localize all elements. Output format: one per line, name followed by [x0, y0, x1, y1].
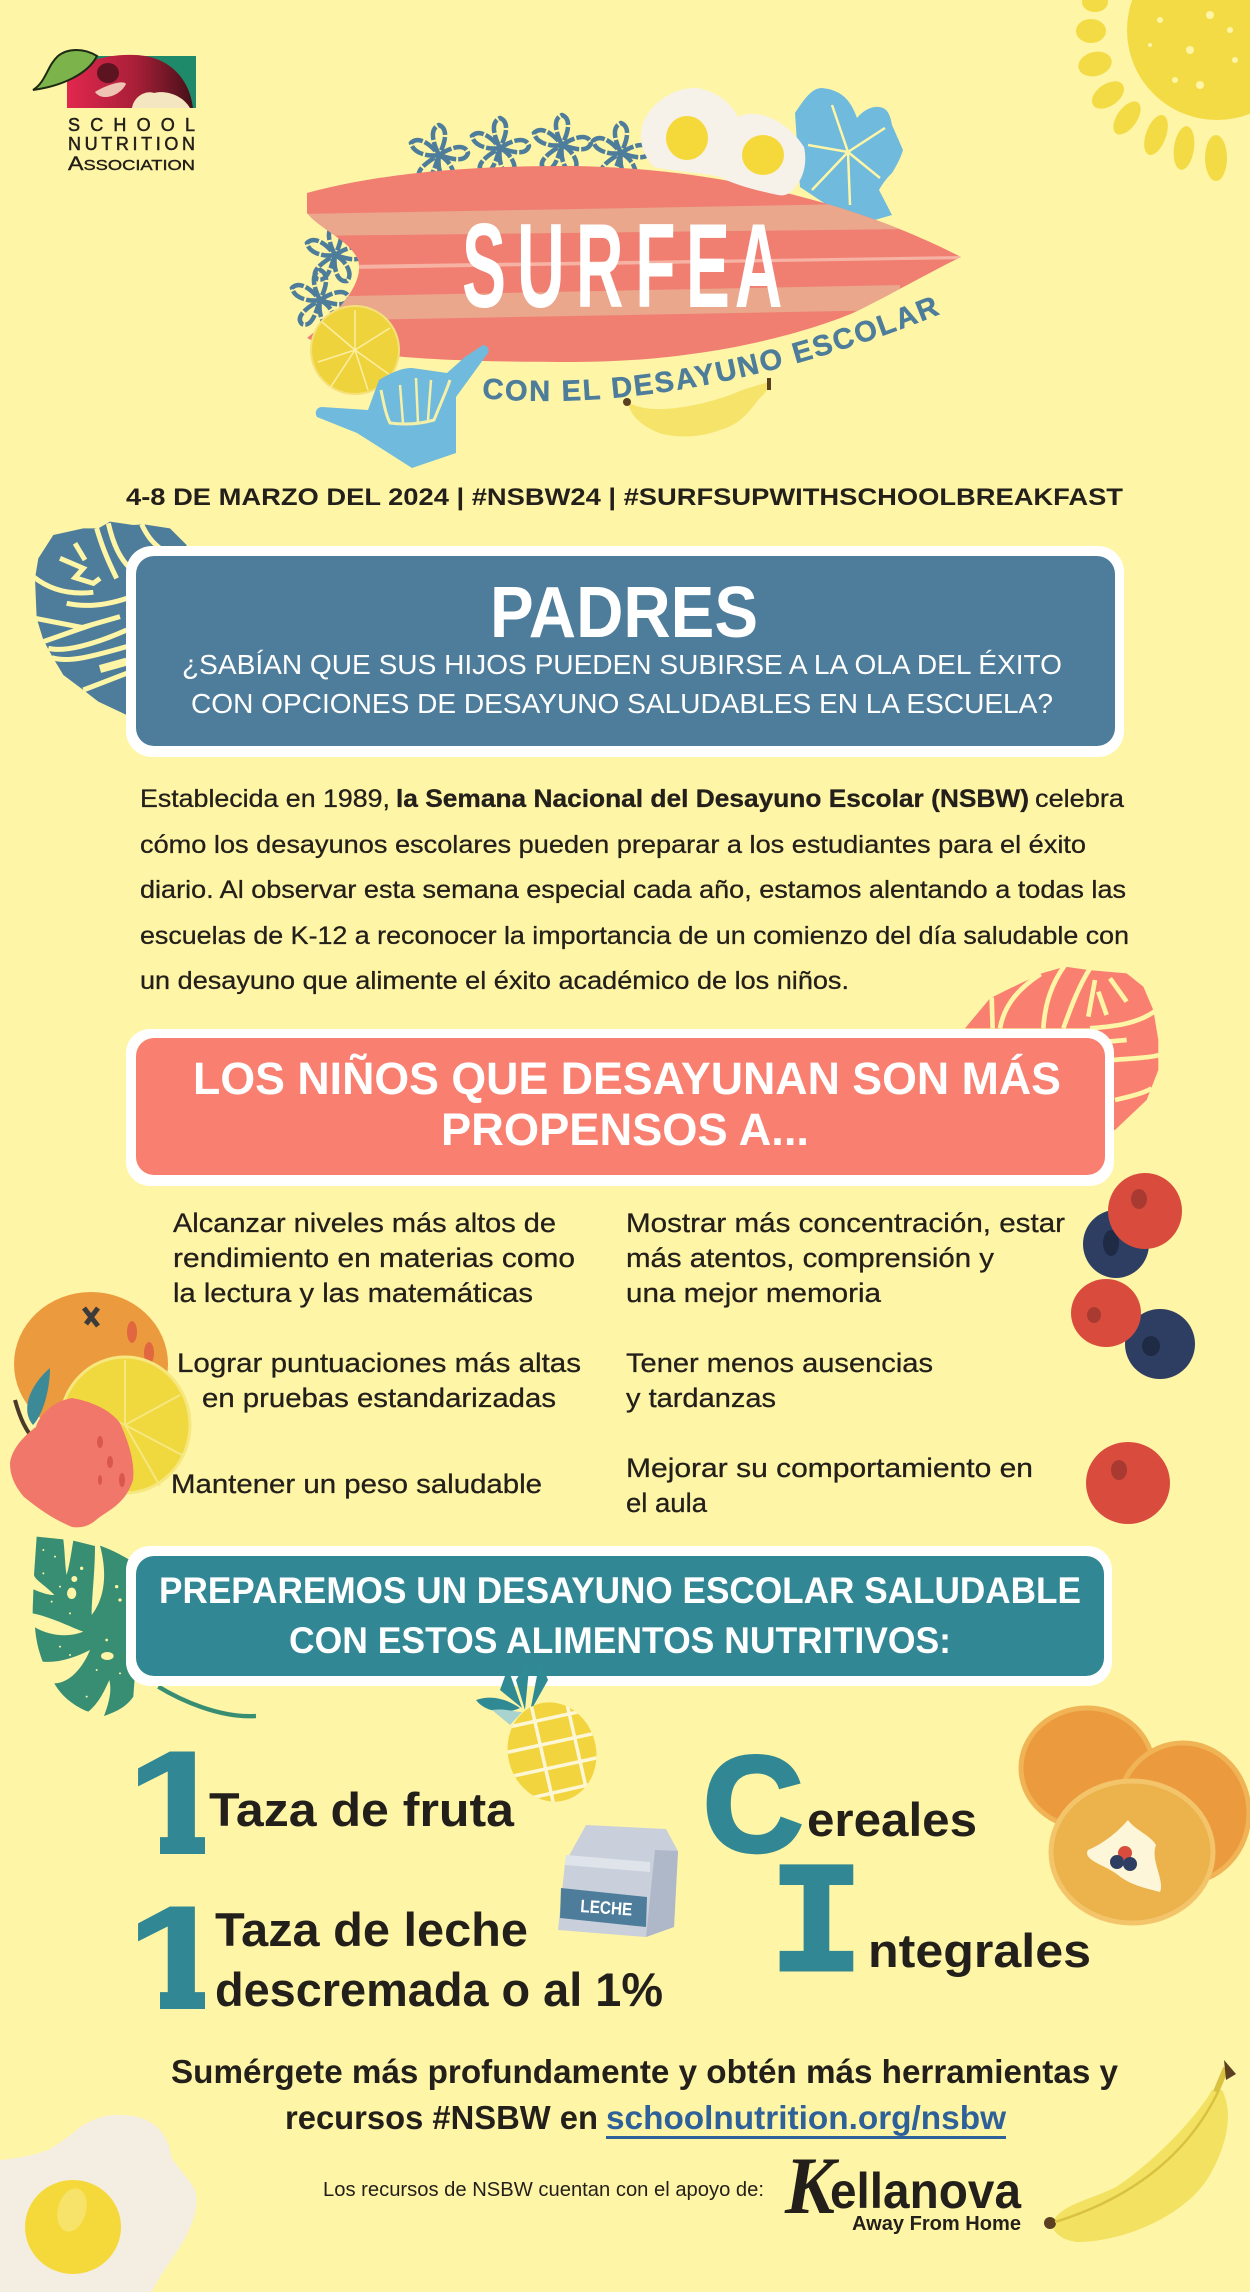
icon: hibiscus flower: [795, 88, 903, 225]
logo: Kellanova: Away From Home: [852, 2213, 1021, 2235]
icon: fried eggs: [641, 88, 805, 195]
icon: pineapple: [476, 1676, 596, 1802]
list: benefits left column: Mantener un peso saludable: [171, 1469, 542, 1499]
list: benefits left column: rendimiento en materias como: [173, 1243, 575, 1273]
heading: los niños: PROPENSOS A...: [441, 1104, 809, 1155]
icon: coral monstera leaf: [965, 965, 1160, 1130]
sponsor line: Los recursos de NSBW cuentan con el apoyo de:: [323, 2179, 764, 2201]
heading: los niños: LOS NIÑOS QUE DESAYUNAN SON MÁS: [193, 1053, 1061, 1104]
icon: green monstera leaf: [33, 1537, 256, 1716]
icon: milk carton: [558, 1825, 678, 1937]
numeral one: 1: [127, 1876, 227, 2039]
icon: tropical flowers top: [411, 115, 650, 181]
logo: Kellanova: [784, 2140, 1022, 2235]
heading: padres: PADRES: [490, 573, 758, 653]
list: benefits right column: el aula: [626, 1488, 708, 1518]
subheading question: ¿SABÍAN QUE SUS HIJOS PUEDEN SUBIRSE A LA OLA DEL ÉXITO: [182, 649, 1062, 680]
intro paragraph: celebra: [1035, 785, 1124, 813]
intro paragraph: cómo los desayunos escolares pueden preparar a los estudiantes para el éxito: [140, 831, 1086, 859]
icon: pancakes: [1021, 1708, 1249, 1923]
intro paragraph: la Semana Nacional del Desayuno Escolar (NSBW): [396, 785, 1029, 813]
food group: 1 taza de fruta: [138, 1752, 514, 1854]
heading: preparemos: CON ESTOS ALIMENTOS NUTRITIVOS:: [289, 1620, 951, 1661]
food group: 1 taza de leche: [138, 1906, 662, 2009]
numeral one: 1: [127, 1721, 227, 1884]
list: benefits right column: y tardanzas: [626, 1383, 776, 1413]
panel: preparemos: [126, 1546, 1112, 1686]
icon: fried egg: [0, 2115, 196, 2292]
list: benefits left column: Lograr puntuaciones más altas: [177, 1348, 581, 1378]
food group: cereales: ereales: [807, 1793, 977, 1846]
icon: tropical flowers left: [292, 225, 364, 326]
icon: milk carton: LECHE: [580, 1896, 633, 1920]
heading: preparemos: [159, 1570, 1081, 1661]
list: benefits left column: la lectura y las matemáticas: [173, 1278, 533, 1308]
logo: Kellanova: ellanova: [830, 2163, 1022, 2219]
icon: lemon slice: [311, 306, 399, 394]
link: schoolnutrition.org/nsbw: schoolnutrition.org/nsbw: [606, 2099, 1006, 2136]
panel: los niños: [126, 1029, 1114, 1186]
intro paragraph: un desayuno que alimente el éxito académico de los niños.: [140, 967, 849, 995]
heading: preparemos: PREPAREMOS UN DESAYUNO ESCOLAR SALUDABLE: [159, 1570, 1081, 1611]
call to action: recursos #NSBW en: [285, 2099, 598, 2136]
list: benefits right column: una mejor memoria: [626, 1278, 882, 1308]
icon: banana: [623, 378, 771, 436]
subtitle: con el desayuno escolar: CON EL DESAYUNO ESCOLAR: [484, 298, 940, 402]
subheading question: CON OPCIONES DE DESAYUNO SALUDABLES EN LA ESCUELA?: [191, 688, 1053, 719]
food group: cereales: [703, 1728, 977, 1880]
list: benefits left column: [171, 1208, 581, 1499]
logo: School Nutrition Association: SCHOOL: [68, 115, 195, 135]
food group: integrales: ntegrales: [868, 1924, 1091, 1977]
icon: sun: [1075, 0, 1250, 181]
list: benefits right column: más atentos, comprensión y: [626, 1243, 995, 1273]
list: benefits right column: Tener menos ausencias: [626, 1348, 933, 1378]
intro paragraph: escuelas de K-12 a reconocer la importancia de un comienzo del día saludable con: [140, 922, 1129, 950]
intro paragraph: Establecida en 1989,: [140, 785, 390, 813]
intro paragraph: diario. Al observar esta semana especial cada año, estamos alentando a todas las: [140, 876, 1126, 904]
date and hashtags: 4-8 DE MARZO DEL 2024 | #NSBW24 | #SURFSUPWITHSCHOOLBREAKFAST: [126, 484, 1123, 511]
icon: shaka hand: [316, 345, 489, 468]
logo: School Nutrition Association: NUTRITION: [68, 134, 195, 154]
list: benefits right column: [626, 1208, 1065, 1518]
logo: Kellanova: K: [784, 2140, 840, 2231]
list: benefits left column: en pruebas estandarizadas: [202, 1383, 556, 1413]
hero: surfboard logo: [290, 88, 961, 468]
icon: blueberries: [1071, 1173, 1195, 1524]
icon: blue monstera leaf: [33, 522, 187, 732]
icon: banana: [1044, 2060, 1236, 2242]
subheading question: [182, 649, 1062, 719]
food group: integrales: [769, 1839, 1091, 2018]
call to action: [171, 2053, 1119, 2139]
title: SURFEA: SURFEA: [462, 198, 782, 333]
logo: School Nutrition Association: [33, 50, 196, 175]
food group: 1 taza de leche: Taza de leche: [215, 1903, 528, 1956]
food group: cereales: C: [703, 1728, 803, 1880]
logo: School Nutrition Association: ASSOCIATION: [68, 154, 195, 175]
panel: padres: [126, 546, 1124, 757]
icon: fruit group: [10, 1292, 190, 1527]
intro paragraph: [140, 785, 1129, 995]
food group: integrales: I: [769, 1839, 864, 2018]
heading: los niños: [193, 1053, 1061, 1155]
list: benefits right column: Mostrar más concentración, estar: [626, 1208, 1065, 1238]
call to action: Sumérgete más profundamente y obtén más herramientas y: [171, 2053, 1119, 2090]
list: benefits left column: Alcanzar niveles más altos de: [173, 1208, 556, 1238]
food group: 1 taza de fruta: Taza de fruta: [209, 1783, 515, 1836]
surfboard: [300, 166, 965, 362]
food group: 1 taza de leche: descremada o al 1%: [215, 1963, 663, 2016]
list: benefits right column: Mejorar su comportamiento en: [626, 1453, 1033, 1483]
